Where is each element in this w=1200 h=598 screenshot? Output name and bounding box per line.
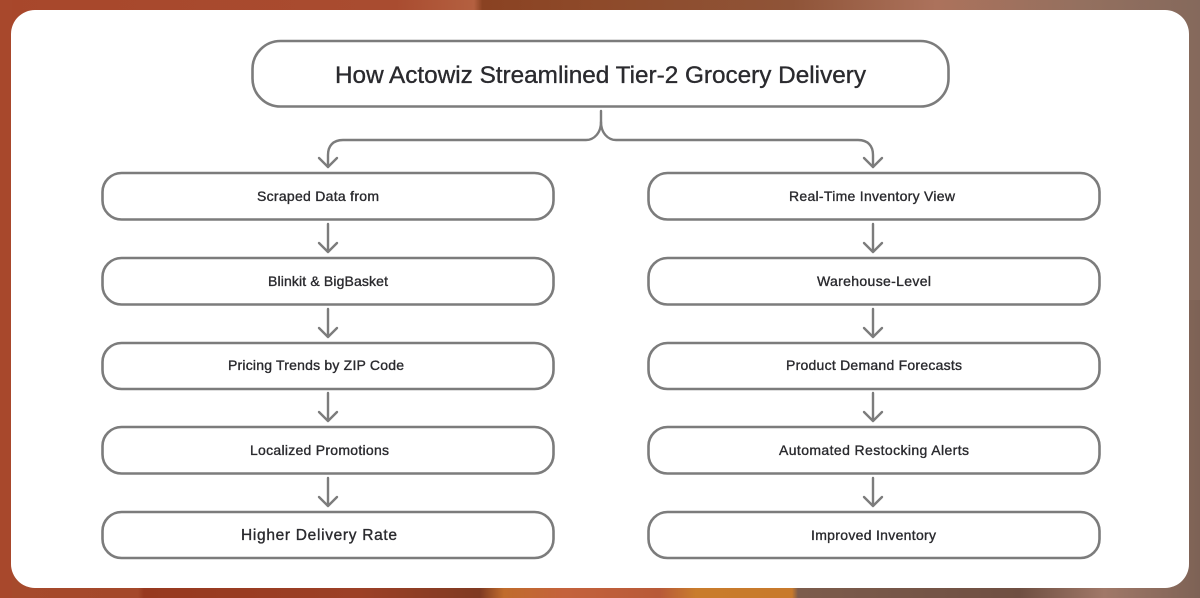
- step: Pricing Trends by ZIP Code: Pricing Trends by ZIP Code: [228, 357, 404, 373]
- left column flow: [102, 173, 554, 558]
- step: Improved Inventory: Improved Inventory: [811, 527, 936, 543]
- step: Blinkit & BigBasket: [102, 258, 554, 304]
- step: Warehouse-Level: Warehouse-Level: [817, 273, 931, 289]
- step: Product Demand Forecasts: Product Demand Forecasts: [786, 357, 962, 373]
- arrow: [864, 224, 882, 252]
- step: Product Demand Forecasts: [648, 343, 1100, 389]
- branching connector arrows: [319, 111, 882, 167]
- step: Scraped Data from: [102, 173, 554, 220]
- step: Localized Promotions: Localized Promotions: [250, 442, 389, 458]
- arrow: [864, 478, 882, 506]
- step: Higher Delivery Rate: Higher Delivery Rate: [241, 527, 397, 544]
- title box: [252, 41, 948, 106]
- step: Blinkit & BigBasket: Blinkit & BigBasket: [268, 273, 388, 289]
- step: Localized Promotions: [102, 427, 554, 474]
- arrow: [864, 393, 882, 421]
- title box: How Actowiz Streamlined Tier-2 Grocery Delivery: [335, 62, 866, 89]
- step: Warehouse-Level: [648, 258, 1100, 304]
- step: Pricing Trends by ZIP Code: [102, 343, 554, 389]
- arrow: [319, 478, 337, 506]
- step: Higher Delivery Rate: [102, 512, 554, 558]
- step: Automated Restocking Alerts: Automated Restocking Alerts: [779, 442, 969, 458]
- step: Scraped Data from: Scraped Data from: [257, 188, 379, 204]
- step: Automated Restocking Alerts: [648, 427, 1100, 474]
- step: Improved Inventory: [648, 512, 1100, 558]
- arrow: [319, 309, 337, 337]
- arrow: [319, 393, 337, 421]
- arrow: [319, 224, 337, 252]
- step: Real-Time Inventory View: Real-Time Inventory View: [789, 188, 956, 204]
- arrow: [864, 309, 882, 337]
- right column flow: [648, 173, 1100, 558]
- step: Real-Time Inventory View: [648, 173, 1100, 220]
